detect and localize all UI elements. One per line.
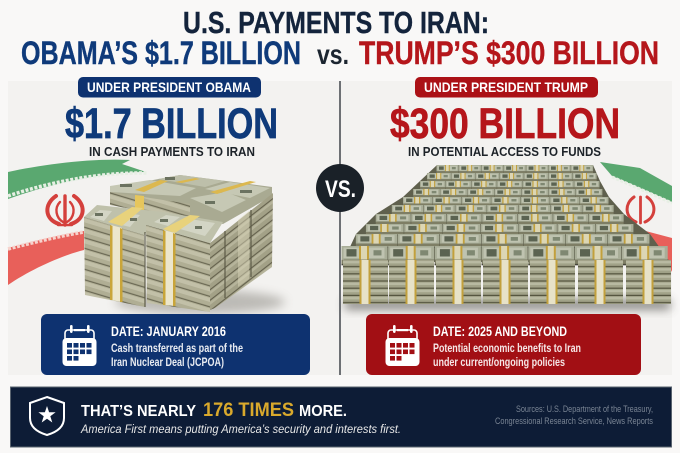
Iran flag: red brush stroke <box>8 231 84 285</box>
title: vs. <box>317 39 349 70</box>
date box: Obama: Iran Nuclear Deal (JCPOA) <box>111 357 224 369</box>
left header badge: UNDER PRESIDENT OBAMA <box>87 79 251 95</box>
banner headline: MORE. <box>299 403 347 420</box>
right header badge: UNDER PRESIDENT TRUMP <box>424 79 588 95</box>
left subtitle: IN CASH PAYMENTS TO IRAN <box>89 144 255 159</box>
date box: Obama: Cash transferred as part of the <box>111 343 243 355</box>
Iran flag: green brush stroke <box>8 160 148 199</box>
date box: Trump: under current/ongoing policies <box>433 357 565 369</box>
date box: Obama <box>41 314 310 375</box>
Iran flag: emblem <box>47 196 83 225</box>
sources <box>495 404 653 427</box>
date box: Trump: Potential economic benefits to Iran <box>433 343 581 355</box>
banner tagline: America First means putting America’s security and interests first. <box>80 422 401 436</box>
icon: calendar <box>386 325 420 366</box>
banner headline <box>81 400 347 421</box>
banner headline: THAT’S NEARLY <box>81 403 196 420</box>
banner headline: 176 TIMES <box>203 400 294 421</box>
right subtitle: IN POTENTIAL ACCESS TO FUNDS <box>408 144 601 159</box>
date box: Trump <box>366 314 641 375</box>
right big figure: $300 BILLION <box>390 100 620 148</box>
icon: shield with star <box>30 397 64 435</box>
bottom banner <box>10 387 672 447</box>
center divider <box>339 81 341 375</box>
panel: Obama <box>8 81 339 375</box>
money pile: $300 billion <box>342 165 671 309</box>
money pile: $1.7 billion <box>84 175 285 314</box>
Iran flag: right side <box>600 162 672 272</box>
date box: Obama: DATE: JANUARY 2016 <box>111 323 226 339</box>
date box: Trump: DATE: 2025 AND BEYOND <box>433 323 567 339</box>
vs. badge <box>316 164 364 212</box>
title <box>21 5 659 71</box>
left header badge <box>78 77 261 98</box>
title: OBAMA’S $1.7 BILLION <box>21 35 301 71</box>
left big figure: $1.7 BILLION <box>65 100 278 148</box>
vs. badge: VS. <box>325 176 356 203</box>
icon: calendar <box>62 325 96 366</box>
title: U.S. PAYMENTS TO IRAN: <box>183 5 489 40</box>
panel: Trump <box>341 81 672 375</box>
